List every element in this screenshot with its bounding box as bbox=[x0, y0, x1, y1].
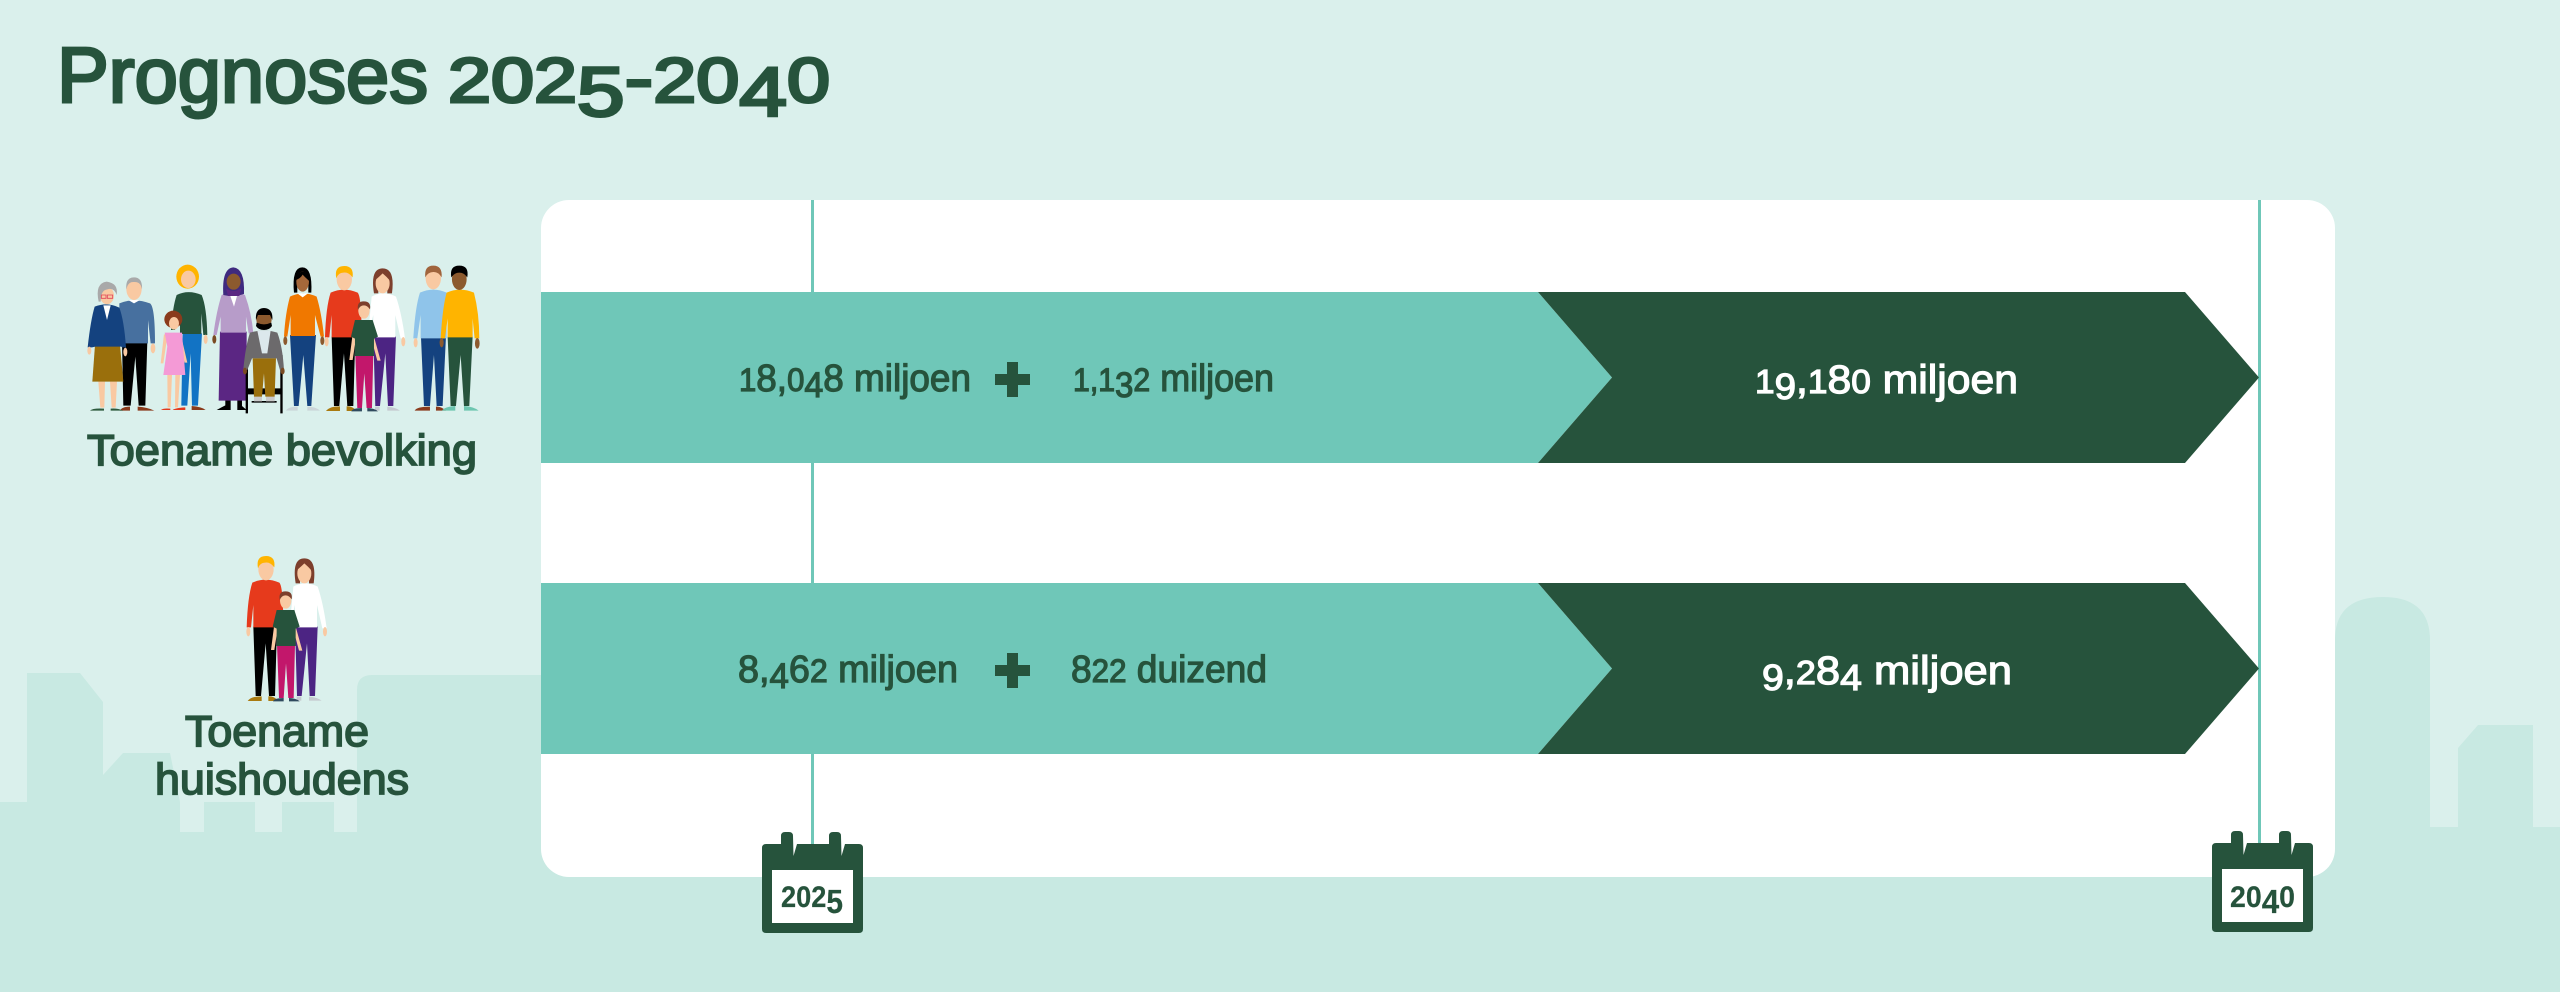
calendar icon 2040 bbox=[2212, 831, 2313, 932]
person: man in yellow bbox=[440, 266, 480, 411]
value 2025 households: 2 miljoen bbox=[810, 649, 959, 691]
person: boy in green bbox=[349, 301, 381, 411]
icon: group of people bbox=[87, 265, 480, 413]
person: man in light blue bbox=[413, 266, 447, 411]
dark arrow segment bbox=[1538, 292, 2259, 463]
teal arrow segment bbox=[541, 292, 1612, 463]
value 2040 households: , bbox=[1784, 649, 1796, 693]
title: 20 bbox=[653, 46, 739, 116]
value 2025 households: 8, bbox=[738, 649, 770, 691]
person: woman in white bbox=[368, 268, 405, 411]
value population growth: 3 bbox=[1115, 366, 1133, 405]
value population growth: 1,1 bbox=[1073, 362, 1115, 398]
value 2040 population: 9 bbox=[1775, 366, 1796, 407]
value 2040 households: miljoen bbox=[1862, 649, 2012, 693]
calendar icon 2040: 0 bbox=[2279, 881, 2295, 914]
person: woman in orange bbox=[283, 267, 324, 411]
calendar icon 2025: 5 bbox=[826, 883, 843, 920]
title: 0 bbox=[787, 46, 830, 116]
plus sign bbox=[995, 362, 1030, 397]
calendar icon 2025: 202 bbox=[781, 881, 826, 914]
title bbox=[57, 31, 830, 131]
calendar icon 2040: 20 bbox=[2230, 881, 2262, 914]
value 2040 households: 4 bbox=[1840, 657, 1862, 698]
calendar icon 2040: 4 bbox=[2262, 883, 2280, 920]
person: woman with hijab bbox=[212, 267, 253, 410]
teal arrow segment bbox=[541, 583, 1612, 754]
value population growth: miljoen bbox=[1161, 358, 1281, 400]
title: 4 bbox=[739, 53, 787, 131]
person: blonde woman bbox=[171, 265, 208, 410]
title: - bbox=[625, 39, 653, 117]
value 2040 population: , bbox=[1796, 358, 1808, 402]
value 2040 households: 28 bbox=[1796, 649, 1838, 693]
white chart panel bbox=[541, 200, 2335, 877]
plus sign bbox=[995, 653, 1030, 688]
person: older man bbox=[119, 277, 155, 411]
row: toename huishoudens arrow bbox=[541, 583, 2259, 754]
value household growth: 822 duizend bbox=[1071, 649, 1267, 691]
icon: family bbox=[246, 556, 327, 701]
value 2025 households: 6 bbox=[789, 649, 810, 691]
person: girl in pink dress bbox=[161, 311, 187, 410]
row: toename bevolking arrow bbox=[541, 292, 2259, 463]
person: man in wheelchair bbox=[243, 308, 285, 413]
label: toename huishoudens: huishoudens bbox=[155, 755, 409, 804]
person: man in red bbox=[325, 266, 362, 411]
title: 202 bbox=[448, 46, 577, 116]
title: 5 bbox=[577, 53, 625, 131]
person: older woman bbox=[87, 282, 127, 411]
label: toename huishoudens: Toename bbox=[185, 707, 369, 756]
value population growth: 2 bbox=[1133, 362, 1150, 398]
title: Prognoses bbox=[57, 31, 428, 119]
label: toename huishoudens bbox=[155, 707, 409, 804]
value 2025 population: 8 bbox=[823, 358, 844, 400]
label: toename bevolking: Toename bevolking bbox=[87, 426, 477, 475]
value 2025 population: 18,0 bbox=[739, 358, 805, 400]
calendar icon 2025 bbox=[762, 832, 863, 933]
timeline marker 2040 bbox=[2258, 200, 2261, 850]
value 2040 population: 180 miljoen bbox=[1808, 358, 2009, 402]
timeline marker 2025 bbox=[811, 200, 814, 850]
dark arrow segment bbox=[1538, 583, 2259, 754]
value 2040 households: 9 bbox=[1762, 657, 1784, 698]
value 2025 population: 4 bbox=[804, 366, 823, 405]
value 2025 population: miljoen bbox=[854, 358, 975, 400]
value 2040 population: 1 bbox=[1755, 363, 1775, 400]
family trio bbox=[325, 266, 405, 411]
value 2025 households: 4 bbox=[770, 657, 789, 696]
